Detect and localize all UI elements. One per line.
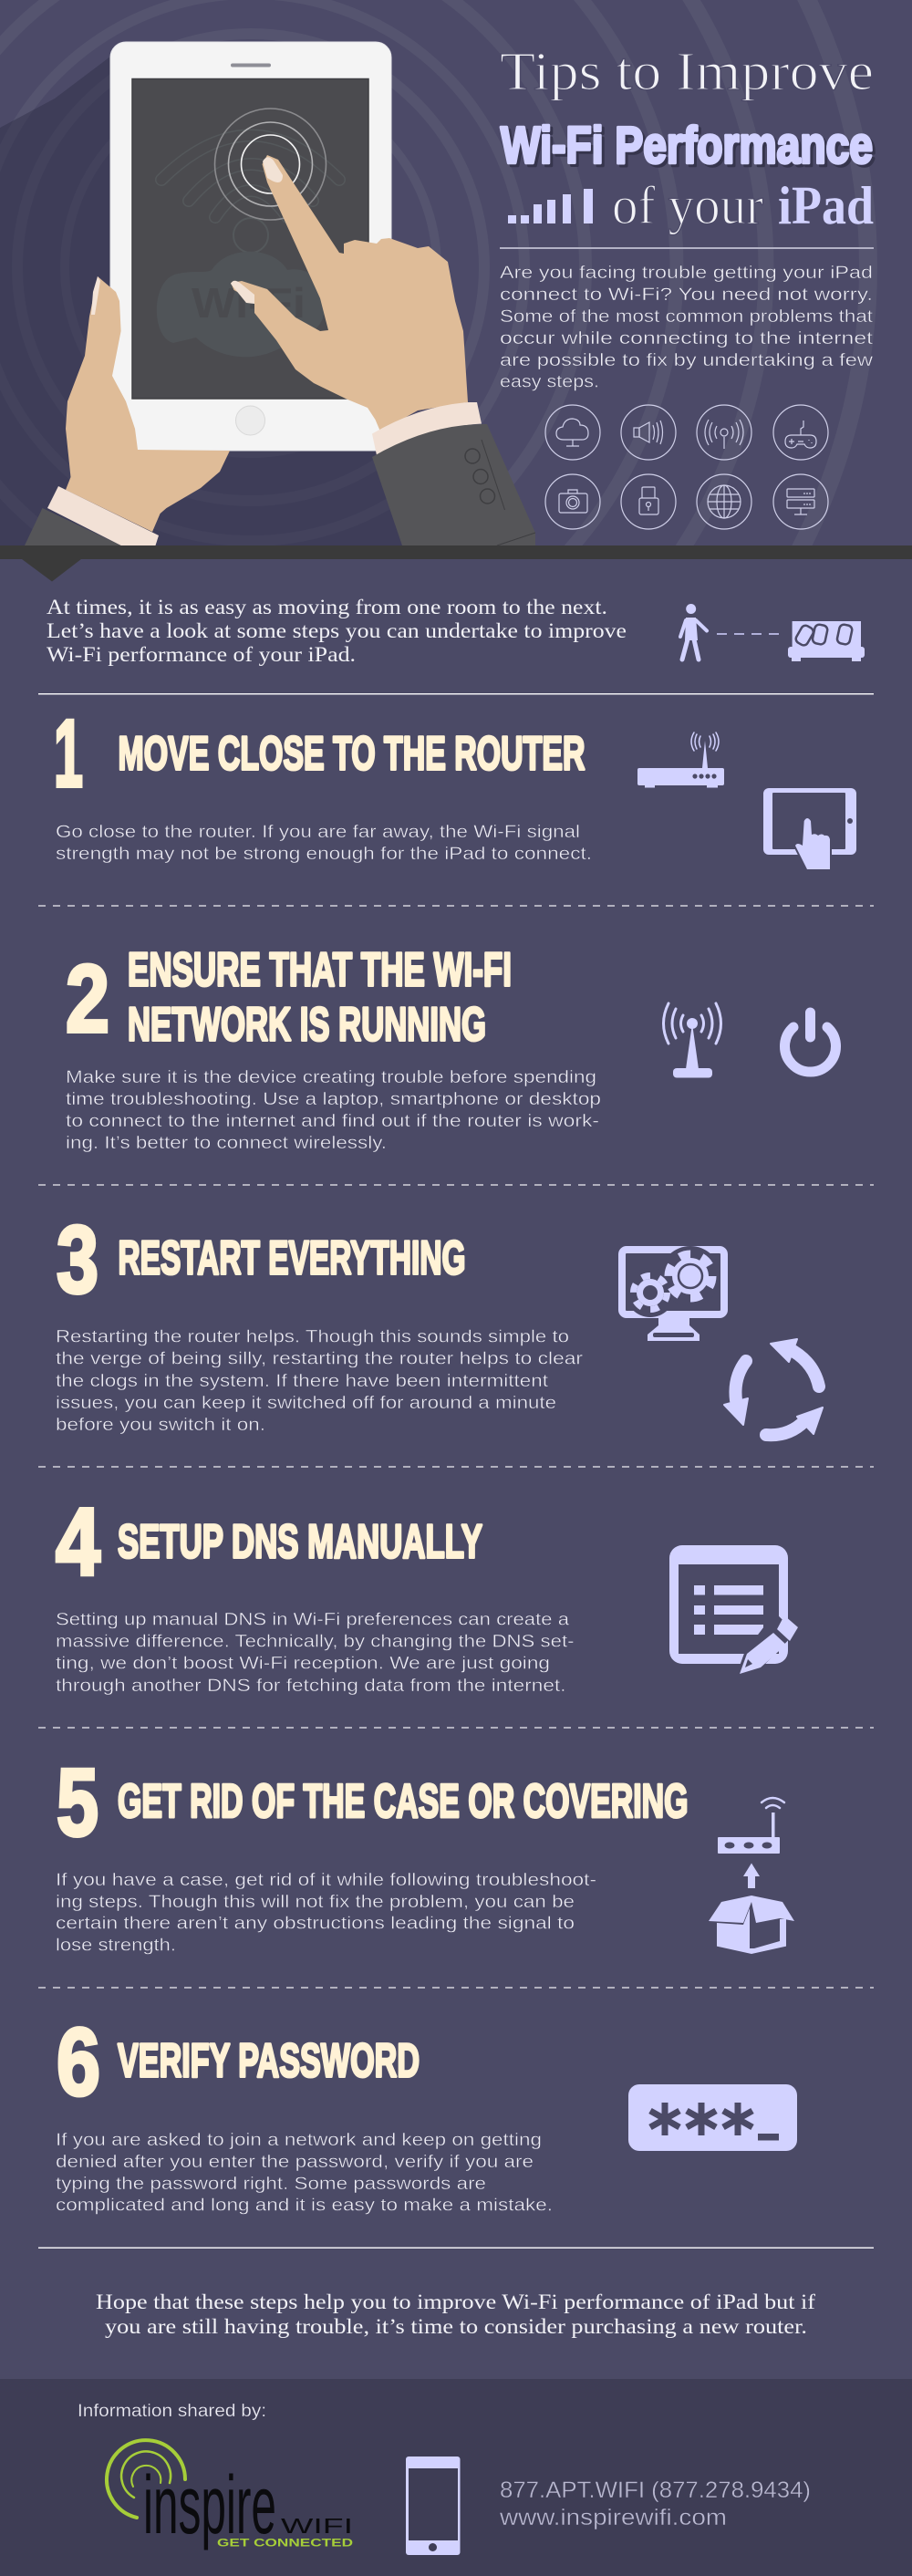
body text: If you have a case, get rid of it while following troubleshoot- [56, 1871, 596, 1890]
body text: to connect to the internet and find out if the router is work- [66, 1112, 599, 1131]
text: lead-in: Wi-Fi performance of your iPad. [47, 643, 356, 666]
panel: moving between rooms [47, 596, 865, 666]
body text [66, 1068, 601, 1153]
body text: Restarting the router helps. Though this sounds simple to [56, 1328, 569, 1346]
step number: 3 [57, 1207, 98, 1314]
body text: Setting up manual DNS in Wi-Fi preferences can create a [56, 1610, 569, 1629]
icon: router [637, 732, 724, 788]
panel: footer [0, 2379, 912, 2576]
contact details: www.inspirewifi.com [499, 2505, 727, 2530]
intro paragraph: are possible to fix by undertaking a few [500, 351, 873, 370]
panel: step 4 [56, 1489, 798, 1696]
body text: before you switch it on. [56, 1416, 265, 1435]
text: lead-in [47, 596, 627, 666]
icon: antenna [664, 1003, 720, 1078]
icon: password field [628, 2084, 797, 2151]
heading [128, 943, 512, 1051]
icon: tablet with touch [763, 788, 856, 869]
panel: step 1 [54, 701, 856, 869]
body text: Go close to the router. If you are far away, the Wi-Fi signal [56, 823, 580, 842]
step number: 6 [57, 2010, 100, 2116]
panel: step 2 [66, 943, 836, 1153]
title: iPad [778, 175, 874, 235]
signal bars [508, 189, 593, 223]
body text: lose strength. [56, 1937, 176, 1956]
icon: speaker [621, 405, 676, 460]
iPad home button [235, 406, 264, 435]
icon: settings document with pencil [669, 1545, 798, 1674]
icon: camera [545, 474, 600, 529]
title [500, 41, 874, 235]
body text: If you are asked to join a network and keep on getting [56, 2131, 542, 2150]
fingernail: thumb [231, 281, 254, 304]
body text [56, 1328, 584, 1435]
intro paragraph: connect to Wi-Fi? You need not worry. [500, 286, 873, 305]
fingernail: index [263, 157, 283, 182]
icon: globe [697, 474, 751, 529]
body text: denied after you enter the password, verify if you are [56, 2153, 534, 2172]
body text [56, 1871, 596, 1956]
intro paragraph: occur while connecting to the internet [500, 329, 874, 348]
body text: ting, we don’t boost Wi-Fi reception. We are just going [56, 1655, 550, 1674]
step number: 5 [57, 1750, 98, 1856]
step number: 2 [66, 946, 109, 1053]
body text: time troubleshooting. Use a laptop, smartphone or desktop [66, 1090, 601, 1109]
iPad speaker [231, 64, 271, 68]
title: of your [612, 175, 763, 235]
title: Tips to Improve [500, 41, 874, 101]
icon: cloud [545, 405, 600, 460]
icon: restart arrows [724, 1339, 823, 1435]
icon: phone [406, 2457, 460, 2555]
closing text [96, 2290, 815, 2338]
intro paragraph: easy steps. [500, 372, 599, 392]
panel: step 3 [56, 1207, 823, 1435]
body text: ing steps. Though this will not fix the problem, you can be [56, 1893, 575, 1912]
heading: NETWORK IS RUNNING [128, 998, 486, 1051]
logo: inspire wifi: GET CONNECTED [217, 2538, 353, 2549]
intro paragraph: Some of the most common problems that [500, 307, 874, 327]
heading: SETUP DNS MANUALLY [118, 1516, 482, 1569]
heading: ENSURE THAT THE WI-FI [128, 943, 512, 996]
jacket sleeve [372, 424, 535, 545]
illustration: right hand [231, 155, 535, 545]
icon: monitor with gears [622, 1246, 724, 1341]
body text: ing. It’s better to connect wirelessly. [66, 1134, 387, 1153]
footer label: Information shared by: [78, 2402, 266, 2421]
icon: game controller [773, 405, 828, 460]
body text: strength may not be strong enough for the iPad to connect. [56, 845, 592, 864]
icon: bed [788, 621, 865, 661]
body text: typing the password right. Some passwords are [56, 2175, 486, 2194]
body text [56, 2131, 553, 2216]
illustration: iPad [110, 42, 391, 451]
body text [56, 823, 592, 864]
body text: certain there aren’t any obstructions leading the signal to [56, 1915, 575, 1934]
body text: through another DNS for fetching data from the internet. [56, 1677, 565, 1696]
intro paragraph: Are you facing trouble getting your iPad [500, 264, 873, 283]
icon: server [773, 474, 828, 529]
illustration: left hand [25, 276, 230, 545]
panel: step 6 [56, 2010, 797, 2216]
step number: 4 [56, 1489, 100, 1595]
icon: person walking [680, 604, 707, 660]
body text: complicated and long and it is easy to make a mistake. [56, 2197, 553, 2216]
body text: issues, you can keep it switched off for around a minute [56, 1394, 556, 1413]
step number: 1 [54, 701, 83, 807]
body text [56, 1610, 575, 1696]
icon: lock [621, 474, 676, 529]
closing text: you are still having trouble, it’s time to consider purchasing a new router. [105, 2315, 807, 2338]
heading: VERIFY PASSWORD [118, 2034, 420, 2087]
body text: massive difference. Technically, by changing the DNS set- [56, 1633, 575, 1651]
contact details [499, 2477, 811, 2530]
heading: RESTART EVERYTHING [119, 1231, 465, 1284]
icon: power [785, 1013, 836, 1072]
logo: inspire wifi: WIFI [281, 2514, 353, 2538]
body text: the verge of being silly, restarting the router helps to clear [56, 1350, 584, 1369]
logo: inspire wifi [107, 2440, 353, 2551]
intro paragraph [500, 264, 874, 392]
heading: MOVE CLOSE TO THE ROUTER [119, 728, 586, 781]
closing text: Hope that these steps help you to improve Wi-Fi performance of iPad but if [96, 2290, 815, 2313]
body text: Make sure it is the device creating trouble before spending [66, 1068, 596, 1087]
text: lead-in: At times, it is as easy as moving from one room to the next. [47, 596, 607, 618]
contact details: 877.APT.WIFI (877.278.9434) [500, 2477, 811, 2503]
icon grid [545, 405, 828, 529]
icon: router and opened box [709, 1798, 794, 1954]
header divider bar with notch [0, 545, 912, 582]
iPad screen: Wi-Fi [192, 279, 306, 327]
panel: header [0, 0, 877, 545]
panel: step 5 [56, 1750, 794, 1956]
iPad screen [132, 78, 368, 399]
text: lead-in: Let’s have a look at some steps you can undertake to improve [47, 619, 627, 642]
body text: the clogs in the system. If there have been intermittent [56, 1372, 549, 1391]
logo: inspire wifi: inspire [143, 2460, 276, 2551]
icon: signal [697, 405, 751, 460]
